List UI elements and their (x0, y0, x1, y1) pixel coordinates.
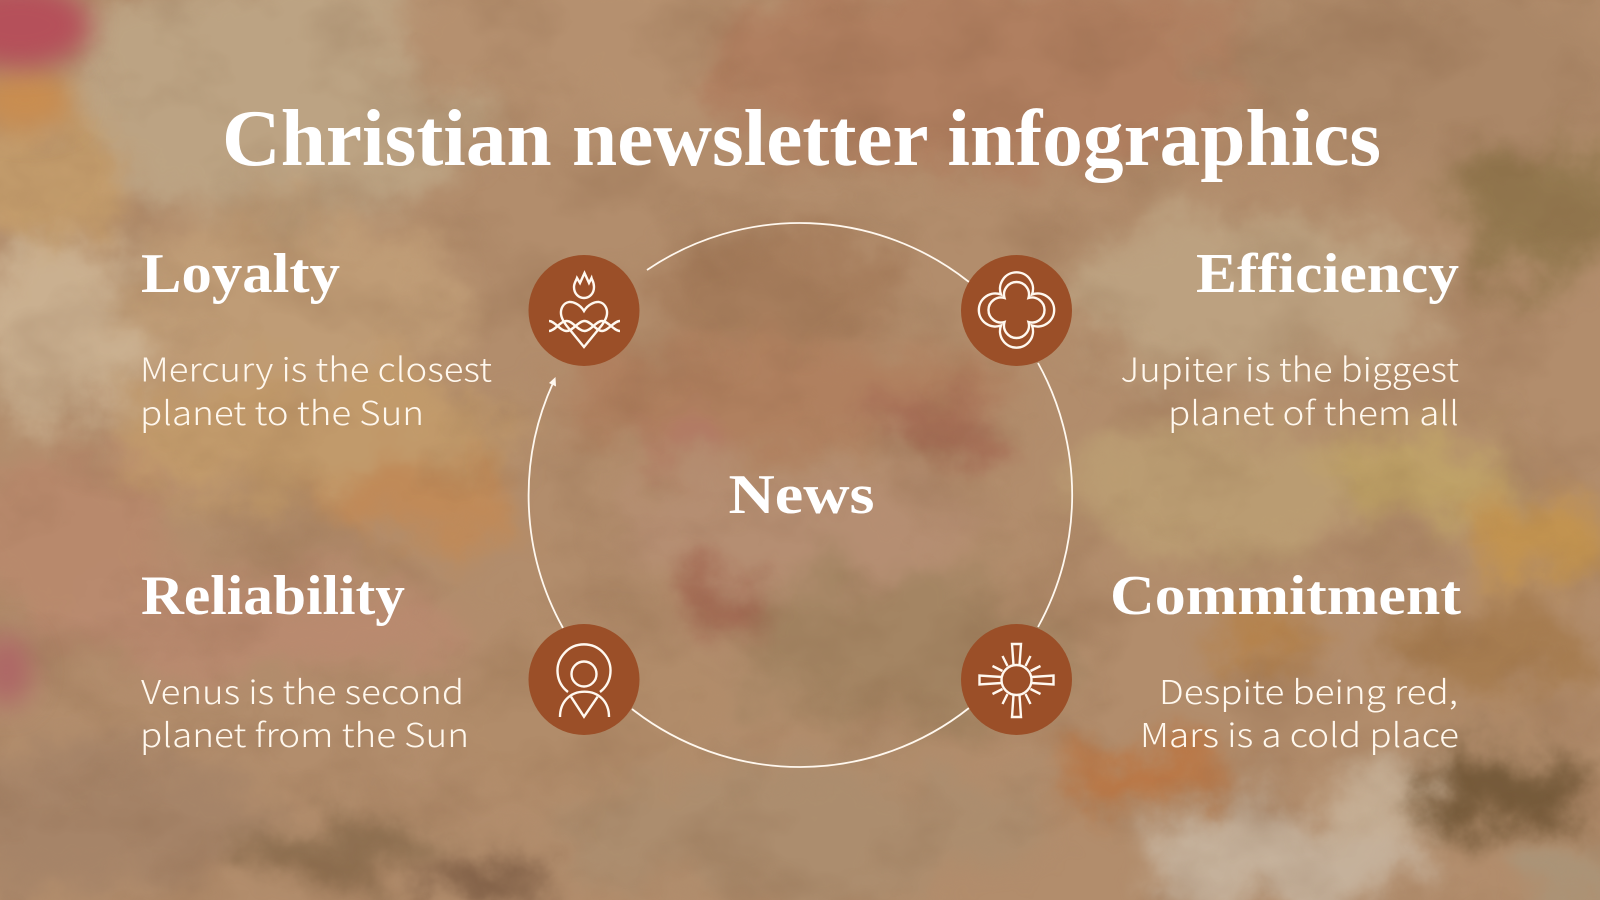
icon: figure with halo (528, 624, 640, 735)
icon: quatrefoil (961, 255, 1072, 366)
icon: flaming heart with thorns (528, 255, 640, 366)
text: Efficiency description: planet of them all (1168, 387, 1459, 435)
item: Reliability (140, 565, 469, 757)
heading: Efficiency: Efficiency (1196, 243, 1459, 305)
item: Efficiency (1120, 243, 1459, 435)
text: Loyalty description: Mercury is the closest (140, 344, 492, 392)
text: Reliability description (140, 666, 469, 757)
center label: News: News (728, 464, 874, 526)
item: Commitment (1110, 565, 1461, 757)
title: Christian newsletter infographics (222, 95, 1381, 183)
text: Commitment description (1140, 666, 1459, 757)
text: Efficiency description: Jupiter is the biggest (1120, 344, 1459, 392)
heading: Loyalty: Loyalty (141, 243, 340, 305)
text: Commitment description: Despite being red, (1159, 666, 1458, 714)
heading: Commitment: Commitment (1110, 565, 1461, 627)
text: Commitment description: Mars is a cold place (1140, 709, 1459, 757)
text: Reliability description: Venus is the second (141, 666, 464, 714)
cycle ring with arrow (529, 223, 1072, 767)
text: Efficiency description (1120, 344, 1459, 435)
text: Reliability description: planet from the Sun (140, 709, 469, 757)
text: Loyalty description: planet to the Sun (140, 387, 424, 435)
icon: radiant sun cross (961, 624, 1072, 735)
item: Loyalty (140, 243, 492, 435)
heading: Reliability: Reliability (141, 565, 405, 627)
text: Loyalty description (140, 344, 492, 435)
